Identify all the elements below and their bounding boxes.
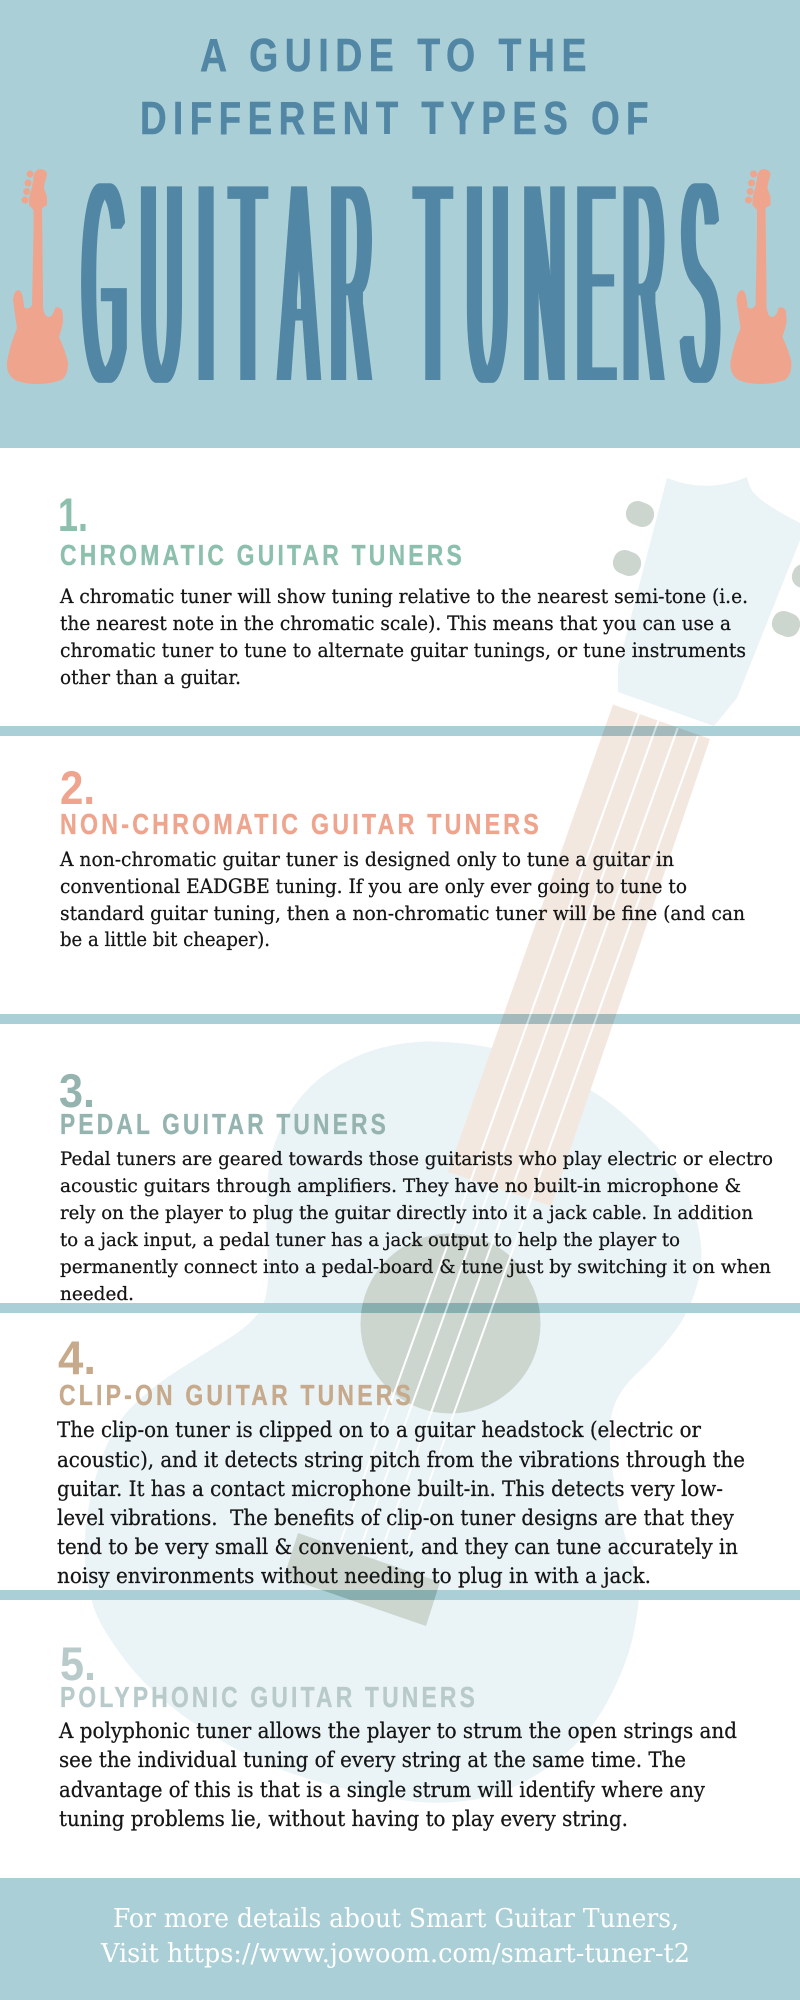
- background guitar headstock: [618, 477, 800, 726]
- body 3: Pedal tuners are geared towards those guitarists who play electric or electro: [60, 1148, 773, 1170]
- body 4: acoustic), and it detects string pitch from the vibrations through the: [57, 1448, 745, 1472]
- body 2: be a little bit cheaper).: [60, 927, 270, 951]
- body 3: needed.: [60, 1283, 134, 1305]
- footer line 2: Visit https://www.jowoom.com/smart-tuner-t2: [100, 1939, 690, 1969]
- section 2: non-chromatic: [59, 761, 745, 951]
- heading 5: POLYPHONIC GUITAR TUNERS: [60, 1682, 478, 1714]
- body 4: tend to be very small & convenient, and they can tune accurately in: [57, 1535, 738, 1559]
- body 5: A polyphonic tuner allows the player to strum the open strings and: [58, 1719, 737, 1743]
- body 4: noisy environments without needing to plug in with a jack.: [57, 1564, 651, 1588]
- header panel: [0, 0, 800, 449]
- number 4: 4.: [58, 1331, 96, 1384]
- body 3: acoustic guitars through amplifiers. They have no built-in microphone &: [60, 1175, 741, 1197]
- heading 4: CLIP-ON GUITAR TUNERS: [59, 1380, 414, 1412]
- guitar seen through the bands: [322, 726, 701, 1600]
- section 5: polyphonic: [58, 1637, 737, 1831]
- body 5: see the individual tuning of every string at the same time. The: [59, 1748, 686, 1772]
- bridge: [284, 1533, 440, 1626]
- body 2: [59, 847, 745, 951]
- body 4: The clip-on tuner is clipped on to a guitar headstock (electric or: [57, 1418, 702, 1442]
- body 1: chromatic tuner to tune to alternate guitar tunings, or tune instruments: [60, 638, 746, 662]
- main title: GUITAR TUNERS: [83, 118, 718, 449]
- body 4: [57, 1418, 745, 1588]
- body 5: [58, 1719, 737, 1831]
- number 1: 1.: [58, 488, 88, 541]
- body 4: level vibrations. The benefits of clip-on tuner designs are that they: [57, 1506, 734, 1530]
- body 1: [59, 584, 748, 689]
- body 5: tuning problems lie, without having to play every string.: [59, 1807, 628, 1831]
- body 1: the nearest note in the chromatic scale). This means that you can use a: [60, 611, 731, 635]
- body 1: other than a guitar.: [60, 665, 241, 689]
- body 3: [60, 1148, 773, 1305]
- body 4: guitar. It has a contact microphone built-in. This detects very low-: [57, 1477, 723, 1501]
- section 3: pedal: [59, 1064, 773, 1305]
- icon: left guitar: [7, 169, 68, 384]
- body 2: standard guitar tuning, then a non-chromatic tuner will be fine (and can: [60, 901, 745, 925]
- number 3: 3.: [59, 1064, 95, 1117]
- body 3: rely on the player to plug the guitar directly into it a jack cable. In addition: [60, 1202, 753, 1224]
- separator bands: [0, 726, 800, 1600]
- body 3: permanently connect into a pedal-board & tune just by switching it on when: [60, 1256, 771, 1278]
- heading 1: CHROMATIC GUITAR TUNERS: [60, 540, 465, 572]
- number 5: 5.: [60, 1637, 96, 1690]
- number 2: 2.: [60, 761, 95, 814]
- body 5: advantage of this is that is a single strum will identify where any: [59, 1778, 705, 1802]
- heading 3: PEDAL GUITAR TUNERS: [60, 1109, 389, 1141]
- background guitar body: [85, 1041, 701, 1803]
- body 2: A non-chromatic guitar tuner is designed only to tune a guitar in: [59, 847, 674, 871]
- section 1: chromatic: [58, 488, 748, 689]
- body 3: to a jack input, a pedal tuner has a jack output to help the player to: [60, 1229, 680, 1251]
- section 4: clip-on: [57, 1331, 745, 1588]
- footer panel: [0, 1878, 800, 2000]
- tuning pegs: [610, 498, 800, 640]
- body 1: A chromatic tuner will show tuning relative to the nearest semi-tone (i.e.: [59, 584, 748, 608]
- guitar strings: [334, 712, 698, 1560]
- background guitar neck: [448, 704, 710, 1206]
- heading 2: NON-CHROMATIC GUITAR TUNERS: [60, 809, 542, 841]
- subtitle line 1: A GUIDE TO THE: [200, 29, 593, 81]
- footer line 1: For more details about Smart Guitar Tuners,: [113, 1904, 679, 1934]
- subtitle line 2: DIFFERENT TYPES OF: [140, 92, 655, 144]
- body 2: conventional EADGBE tuning. If you are only ever going to tune to: [60, 874, 687, 898]
- icon: right guitar: [730, 169, 792, 384]
- sound hole: [360, 1234, 540, 1414]
